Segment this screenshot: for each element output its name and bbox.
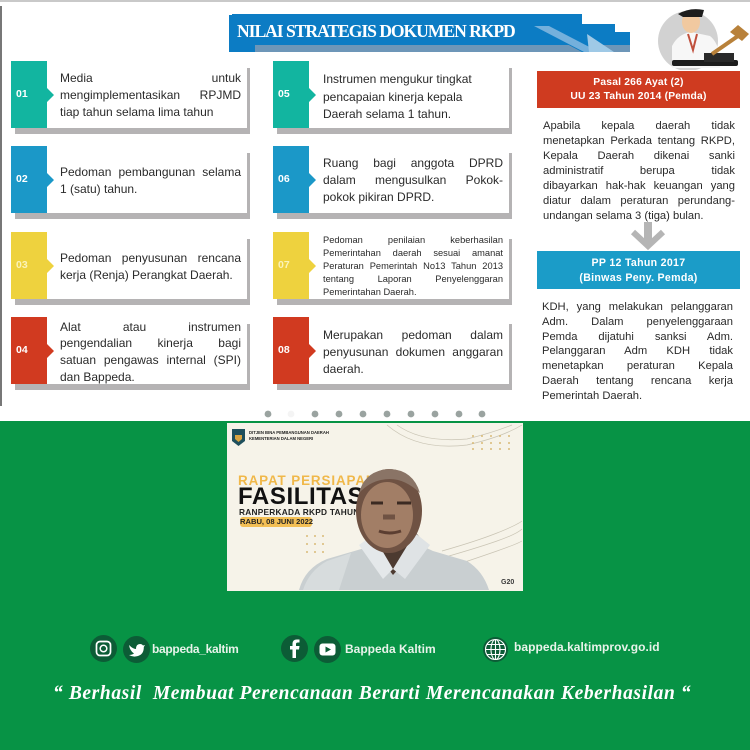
text: card 07: Pemerintahan daerah sesuai amanat	[323, 248, 503, 258]
icon: instagram	[90, 635, 117, 662]
text: card 07: Pemerintahan Daerah.	[323, 287, 417, 297]
card 07	[273, 232, 512, 305]
text: card 01: tiap tahun selama lima tahun	[60, 105, 213, 119]
text: PP 12 explanation: Daerah tentang rencana kerja	[542, 375, 733, 387]
text: PP 12 explanation: menetapkan peraturan Kepala	[542, 360, 733, 372]
card 02: 02	[16, 173, 28, 185]
text: card 03: kerja (Renja) Perangkat Daerah.	[60, 268, 233, 282]
text: card 06: Ruang bagi anggota DPRD	[323, 156, 503, 170]
text: date pill: RABU, 08 JUNI 2022	[240, 517, 313, 526]
text: card 06	[323, 156, 503, 204]
text: card 04	[60, 320, 241, 384]
text: card 07: Peraturan Pemerintah No13 Tahun 2013	[323, 261, 503, 271]
text: PP 12 explanation: Pemerintah Daerah.	[542, 390, 642, 402]
card 04: 04	[16, 344, 28, 356]
text: Pasal 266 explanation: administratif berupa tidak	[543, 165, 735, 177]
icon: ministry logo	[232, 429, 245, 446]
text: card 03: Pedoman penyusunan rencana	[60, 251, 241, 265]
white slide panel	[0, 0, 750, 421]
arrow: down	[631, 222, 665, 250]
text: card 07: tentang Laporan Penyelenggaran	[323, 274, 503, 284]
text: card 04: Alat atau instrumen	[60, 320, 241, 334]
icon: twitter	[123, 636, 150, 663]
text: Pasal 266 explanation: dibayarkan hak-hak keuangan yang	[543, 180, 735, 192]
text: PP 12 explanation: Adm. Dalam penyelenggaraan	[542, 316, 733, 328]
card 03	[11, 232, 250, 305]
text: PP 12 explanation: Pemda dijatuhi sanksi Adm.	[542, 331, 733, 343]
heading: Pasal 266: Pasal 266 Ayat (2)	[593, 77, 684, 88]
text: card 06: pokok pikiran DPRD.	[323, 190, 434, 204]
text: card 08	[323, 328, 503, 376]
text: card 08: daerah.	[323, 362, 364, 376]
pagination dots	[264, 410, 486, 418]
text: Ranperkada: RANPERKADA RKPD TAHUN 2022	[239, 507, 382, 517]
card 06	[273, 146, 512, 219]
text: card 01: Media untuk	[60, 71, 241, 85]
text: url: bappeda.kaltimprov.go.id	[514, 640, 660, 654]
text: card 02: Pedoman pembangunan selama	[60, 165, 241, 179]
text: organiser: KEMENTERIAN DALAM NEGERI	[249, 436, 313, 441]
text: card 01	[60, 71, 241, 119]
card 08: 08	[278, 344, 290, 356]
text: card 04: dan Bappeda.	[60, 370, 135, 384]
text: organiser: DITJEN BINA PEMBANGUNAN DAERAH	[249, 430, 329, 435]
text: card 06: dalam mengusulkan Pokok-	[323, 173, 503, 187]
video still	[227, 423, 523, 591]
text: card 02	[60, 165, 242, 196]
text: card 07	[323, 235, 503, 297]
text: card 04: pengendalian kinerja bagi	[60, 336, 241, 350]
heading: PP 12: (Binwas Peny. Pemda)	[579, 272, 698, 284]
text: handle: bappeda_kaltim	[152, 642, 238, 656]
text: Pasal 266 explanation	[543, 120, 735, 222]
text: card 03	[60, 251, 242, 282]
social: bappeda_kaltim	[90, 635, 238, 663]
card 02	[11, 146, 250, 219]
green footer panel	[0, 421, 750, 750]
social: Bappeda Kaltim	[281, 635, 436, 663]
text: card 01: mengimplementasikan RPJMD	[60, 88, 241, 102]
text: channel: Bappeda Kaltim	[345, 642, 436, 656]
card 06: 06	[278, 173, 290, 185]
card 01	[11, 61, 250, 134]
title banner	[229, 14, 630, 52]
text: card 08: Merupakan pedoman dalam	[323, 328, 503, 342]
text: PP 12 explanation	[542, 301, 733, 402]
text: card 08: penyusunan dokumen anggaran	[323, 345, 503, 359]
tagline: “ Berhasil Membuat Perencanaan Berarti Merencanakan Keberhasilan “	[53, 683, 691, 704]
icon: facebook	[281, 635, 308, 662]
heading: PP 12	[537, 251, 740, 289]
text: Pasal 266 explanation: diatur dalam peraturan perundang-	[543, 195, 735, 207]
icon: G20 mark: G20	[501, 579, 514, 586]
background decoration	[306, 424, 522, 562]
title banner: NILAI STRATEGIS DOKUMEN RKPD	[237, 21, 515, 41]
text: card 05: Instrumen mengukur tingkat	[323, 72, 472, 86]
heading: Pasal 266: UU 23 Tahun 2014 (Pemda)	[570, 91, 707, 102]
text: Pasal 266 explanation: undangan selama 3 (tiga) bulan.	[543, 210, 703, 222]
text: Pasal 266 explanation: menetapkan Perkada tentang RKPD,	[543, 135, 735, 147]
icon: youtube	[314, 636, 341, 663]
text: Pasal 266 explanation: Apabila kepala daerah tidak	[543, 120, 735, 132]
heading: Pasal 266	[537, 71, 740, 108]
card 07: 07	[278, 259, 290, 271]
card 08	[273, 317, 512, 390]
text: Fasilitasi: FASILITASI	[238, 483, 372, 510]
icon: officer with gavel	[658, 9, 749, 70]
text: card 04: satuan pengawas internal (SPI)	[60, 353, 241, 367]
text: card 05	[323, 72, 472, 121]
text: Rapat Persiapan: RAPAT PERSIAPAN	[238, 473, 376, 488]
card 03: 03	[16, 259, 28, 271]
person	[299, 469, 489, 590]
heading: PP 12: PP 12 Tahun 2017	[592, 257, 685, 269]
text: card 07: Pedoman penilaian keberhasilan	[323, 235, 503, 245]
social: website	[483, 637, 660, 662]
text: card 05: Daerah selama 1 tahun.	[323, 107, 451, 121]
text: Pasal 266 explanation: Kepala Daerah dikenai sanki	[543, 150, 735, 162]
text: card 02: 1 (satu) tahun.	[60, 182, 137, 196]
text: organiser	[249, 430, 329, 441]
text: PP 12 explanation: KDH, yang melakukan pelanggaran	[542, 301, 733, 313]
text: PP 12 explanation: Pelanggaran Adm KDH tidak	[542, 345, 733, 357]
card 05	[273, 61, 512, 134]
text: card 05: pencapaian kinerja kepala	[323, 90, 462, 104]
card 05: 05	[278, 88, 290, 100]
card 01: 01	[16, 88, 28, 100]
card 04	[11, 317, 250, 390]
icon: globe	[483, 637, 508, 662]
